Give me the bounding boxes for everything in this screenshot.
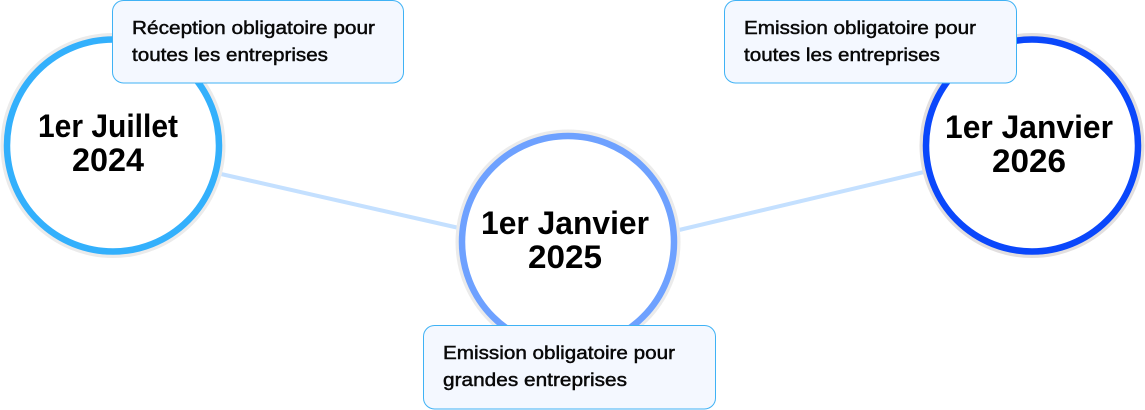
connector: 2025 to 2026 xyxy=(679,172,924,230)
milestone circle: 1er Juillet 2024: 2024 xyxy=(72,142,144,178)
milestone circle: 1er Janvier 2026: 1er Janvier xyxy=(945,109,1113,145)
callout: réception 2024 xyxy=(112,0,404,83)
milestone circle: 1er Janvier 2026 xyxy=(920,33,1144,258)
milestone circle: 1er Juillet 2024: 1er Juillet xyxy=(38,108,178,144)
milestone circle: 1er Janvier 2026: 2026 xyxy=(992,143,1066,179)
callout: réception 2024: toutes les entreprises xyxy=(132,44,328,65)
callout: émission 2025: grandes entreprises xyxy=(443,369,627,390)
callout: réception 2024: Réception obligatoire pour xyxy=(132,17,375,38)
callout: émission 2025 xyxy=(424,326,716,409)
milestone circle: 1er Janvier 2025: 2025 xyxy=(528,239,602,275)
milestone circle: 1er Janvier 2025: 1er Janvier xyxy=(481,205,649,241)
callout: émission 2026: Emission obligatoire pour xyxy=(744,17,976,38)
milestone circle: 1er Janvier 2025 xyxy=(456,130,680,354)
milestone circle: 1er Juillet 2024 xyxy=(0,33,226,258)
callout: émission 2026 xyxy=(724,0,1016,83)
connector: 2024 to 2025 xyxy=(221,174,459,228)
callout: émission 2025: Emission obligatoire pour xyxy=(443,342,675,363)
callout: émission 2026: toutes les entreprises xyxy=(744,44,940,65)
